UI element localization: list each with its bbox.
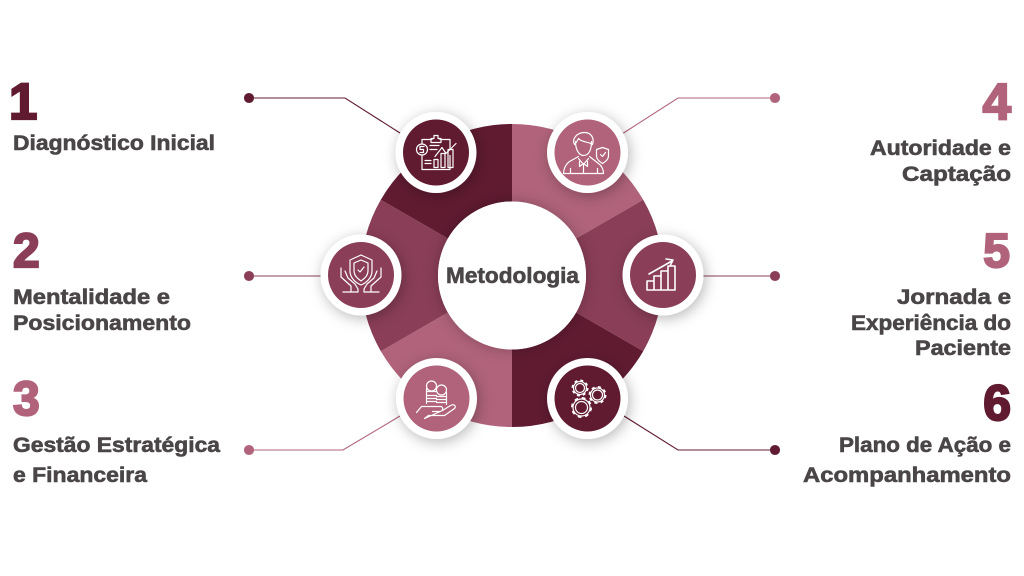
item 1 (9, 73, 215, 155)
item 5 (851, 225, 1011, 360)
number 2: 2 (13, 225, 40, 278)
icon badge 5: growth chart (622, 234, 704, 316)
item 3 (13, 373, 220, 487)
connector 3 (244, 416, 400, 454)
label 5: Experiência do (851, 312, 1011, 335)
icon badge 2: shield and hands (320, 234, 402, 316)
item 6 (803, 375, 1011, 487)
center label: Metodologia (446, 263, 580, 288)
connector 1 (244, 94, 400, 133)
label 2 (13, 286, 191, 335)
label 4: Captação (902, 163, 1011, 186)
donut chart (361, 124, 663, 427)
icon badge 3: coins in hand (396, 358, 477, 439)
connector 5 (702, 272, 780, 280)
label 5: Paciente (915, 337, 1011, 360)
icon badge 1: report (396, 112, 476, 193)
item 4 (870, 73, 1012, 186)
label 5: Jornada e (897, 286, 1011, 309)
label 3: e Financeira (13, 464, 147, 487)
label 6: Acompanhamento (803, 464, 1011, 487)
number 1: 1 (9, 73, 37, 130)
label 2: Posicionamento (13, 312, 191, 335)
connector 2 (244, 272, 322, 280)
label 5 (851, 286, 1011, 360)
icon badge 6: gears (547, 358, 628, 439)
label 3 (13, 434, 220, 487)
number 4: 4 (983, 73, 1012, 130)
label 3: Gestão Estratégica (13, 434, 220, 457)
label 6: Plano de Ação e (839, 434, 1011, 457)
number 3: 3 (13, 373, 40, 426)
label 4: Autoridade e (870, 137, 1011, 160)
number 5: 5 (983, 225, 1010, 278)
label 4 (870, 137, 1011, 186)
label 1: Diagnóstico Inicial (13, 132, 215, 155)
center circle (438, 202, 586, 350)
connector 4 (622, 94, 780, 134)
item 2 (13, 225, 191, 335)
connector 6 (624, 416, 780, 454)
label 6 (803, 434, 1011, 487)
number 6: 6 (983, 375, 1011, 431)
icon badge 4: professional with shield (547, 112, 628, 193)
label 2: Mentalidade e (13, 286, 170, 309)
